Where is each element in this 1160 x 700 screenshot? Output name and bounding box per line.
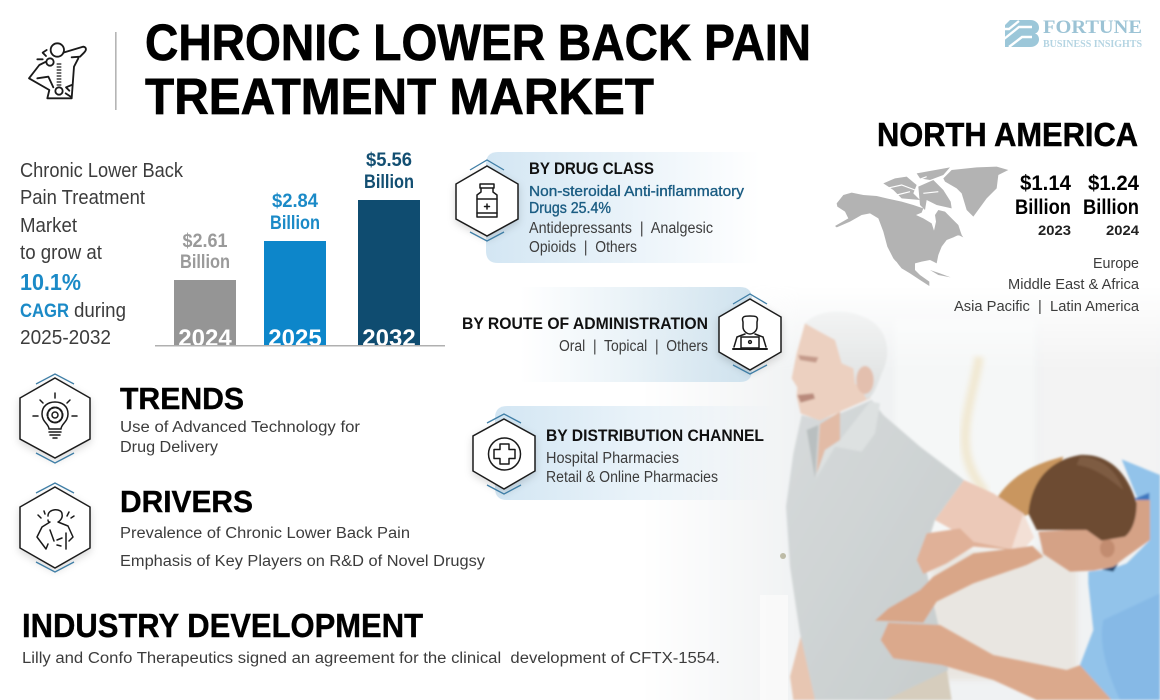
text block: market growth summary (20, 160, 184, 349)
region: North America (835, 116, 1140, 315)
text block: market growth summary: 10.1% (20, 269, 81, 295)
doctor back arm (997, 457, 1063, 517)
stat: 2024: $1.24 (1088, 172, 1139, 195)
region: North America: NORTH AMERICA (877, 116, 1138, 153)
title: CHRONIC LOWER BACK PAIN (145, 14, 811, 71)
doctor neck and face (1038, 500, 1150, 572)
bar: 2032: 2032 (362, 325, 416, 352)
icon: medicine bottle (456, 166, 518, 236)
bar: 2025: $2.84 (272, 191, 318, 212)
divider: header (115, 32, 117, 110)
section: drivers: Prevalence of Chronic Lower Back Pain (120, 525, 410, 542)
stat: 2023: Billion (1015, 196, 1071, 219)
section: trends (20, 374, 360, 463)
bar: 2024: $2.61 (182, 231, 228, 252)
doctor hair (1028, 455, 1137, 541)
doctor lower arm and hand (881, 623, 1113, 700)
text block: market growth summary: to grow at (20, 242, 102, 264)
logo: Fortune Business Insights: FORTUNE (1043, 17, 1142, 38)
stat: 2024: Billion (1083, 196, 1139, 219)
text block: market growth summary: 2025-2032 (20, 327, 111, 349)
spine model (965, 358, 985, 492)
bar: 2032: Billion (364, 172, 414, 193)
text block: market growth summary: Market (20, 215, 77, 237)
patient pants (883, 668, 952, 700)
section: trends: TRENDS (120, 381, 244, 416)
stat: 2023 (1015, 172, 1071, 238)
logo: Fortune Business Insights (1004, 17, 1142, 50)
stat: 2023: 2023 (1038, 222, 1071, 238)
panel: by drug class (456, 152, 760, 263)
title (145, 14, 811, 125)
section: industry development: Lilly and Confo Therapeutics signed an agreement for the clinical development of CFTX-1554. (22, 650, 720, 667)
stat: 2024 (1083, 172, 1139, 238)
icon: medical cross (473, 419, 535, 489)
patient upper arm (935, 480, 1034, 551)
panel: by route of administration (462, 287, 781, 382)
title: TREATMENT MARKET (145, 68, 654, 125)
icon: person with back pain (20, 487, 90, 568)
stat: 2023: $1.14 (1020, 172, 1071, 195)
panel: by distribution channel: BY DISTRIBUTION CHANNEL (546, 426, 764, 445)
bar: 2024 (174, 231, 236, 352)
logo: Fortune Business Insights: BUSINESS INSIGHTS (1043, 38, 1142, 50)
panel: by distribution channel (473, 406, 780, 500)
photo: doctor examining patient's lower back (730, 312, 1160, 700)
section: industry development (22, 607, 720, 667)
section: trends: Use of Advanced Technology for (120, 419, 360, 436)
panel: by drug class: Opioids | Others (529, 239, 637, 256)
bar: 2024: 2024 (178, 325, 232, 352)
panel: by drug class: Antidepressants | Analgesic (529, 220, 713, 237)
section: industry development: INDUSTRY DEVELOPMENT (22, 607, 423, 644)
panel: by drug class: BY DRUG CLASS (529, 159, 654, 178)
text block: market growth summary: during (74, 300, 126, 322)
text block: market growth summary: CAGR (20, 301, 69, 322)
doctor front arm on waist (875, 546, 1043, 623)
list: other regions: Asia Pacific | Latin America (954, 298, 1140, 315)
bar: 2032 (358, 150, 420, 352)
list: other regions (954, 255, 1140, 315)
text block: market growth summary: Chronic Lower Back (20, 160, 184, 182)
panel: by route of administration: Oral | Topical | Others (559, 338, 708, 355)
icon: lightbulb with gear (20, 378, 90, 458)
icon: back pain figure (29, 43, 86, 98)
patient hair (805, 312, 887, 399)
section: drivers (20, 483, 485, 572)
bar: 2025: Billion (270, 213, 320, 234)
panel: by drug class: Drugs 25.4% (529, 200, 611, 217)
panel: by route of administration: BY ROUTE OF ADMINISTRATION (462, 314, 708, 333)
map: North America (835, 167, 1008, 286)
text block: market growth summary: Pain Treatment (20, 187, 145, 209)
bar: 2032: $5.56 (366, 150, 412, 171)
list: other regions: Middle East & Africa (1008, 276, 1140, 293)
bar: 2025 (264, 191, 326, 352)
section: trends: Drug Delivery (120, 439, 218, 456)
section: drivers: Emphasis of Key Players on R&D of Novel Drugsy (120, 553, 485, 570)
bar chart: market size (155, 150, 445, 352)
bar: 2025: 2025 (268, 325, 322, 352)
stat: 2024: 2024 (1106, 222, 1139, 238)
list: other regions: Europe (1093, 255, 1139, 272)
patient neck and face (792, 320, 873, 421)
icon: person at laptop (719, 299, 781, 370)
patient lower hand (790, 637, 818, 700)
section: drivers: DRIVERS (120, 484, 253, 519)
patient shirt (786, 400, 964, 700)
panel: by distribution channel: Retail & Online Pharmacies (546, 469, 718, 486)
panel: by drug class: Non-steroidal Anti-inflammatory (529, 183, 745, 200)
panel: by distribution channel: Hospital Pharmacies (546, 450, 679, 467)
bar: 2024: Billion (180, 252, 230, 273)
doctor scrubs (1080, 459, 1160, 700)
